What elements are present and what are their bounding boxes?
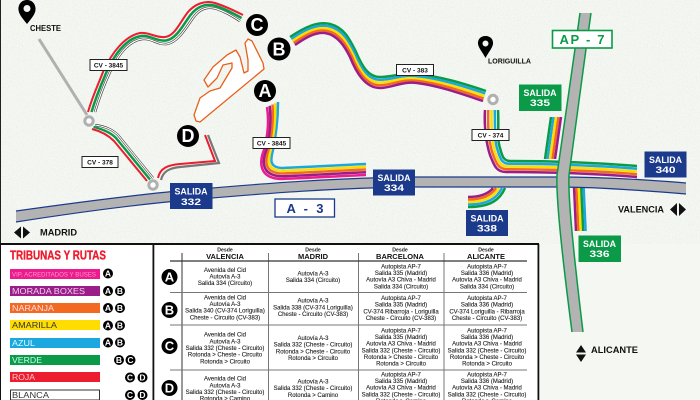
row C routes: Rotonda > Cheste - Circuito xyxy=(450,355,525,361)
legend Blanca: BLANCA xyxy=(12,391,50,400)
row B routes: Autopista AP-7 xyxy=(381,296,422,302)
column header Barcelona xyxy=(376,248,425,261)
row D routes: Rotonda > Camino xyxy=(288,393,339,399)
row C routes: Autovía A3 Chiva - Madrid xyxy=(452,342,522,348)
label CV-378: CV - 378 xyxy=(87,160,113,166)
direction Alicante: ALICANTE xyxy=(591,345,638,355)
exit 338 rainbow stub xyxy=(468,188,505,207)
legend Amarilla xyxy=(10,320,125,330)
legend Blanca: D xyxy=(139,390,146,400)
row A routes: Autovía A-3 xyxy=(209,274,241,280)
row A routes xyxy=(198,264,522,290)
route: rainbow CV-374 xyxy=(485,110,637,177)
pin: Loriguilla: LORIGUILLA xyxy=(488,56,532,66)
legend Roja: C xyxy=(127,372,133,382)
row D routes xyxy=(186,372,526,400)
sign AP-7: AP - 7 xyxy=(560,32,604,47)
row D routes: Autovía A3 Chiva - Madrid xyxy=(452,386,522,392)
exit 332 xyxy=(170,183,212,209)
row A routes: Salida 335 (Madrid) xyxy=(375,271,427,277)
row D routes: Autopista AP-7 xyxy=(381,372,422,378)
row A routes: Avenida del Cid xyxy=(204,268,246,274)
row C routes: Autovía A3 Chiva - Madrid xyxy=(366,342,436,348)
row C routes: Rotonda > Circuito xyxy=(462,362,513,368)
row B routes: Salida 335 (Madrid) xyxy=(375,303,427,309)
legend panel: tribunas y rutas xyxy=(10,248,148,400)
row C routes: Avenida del Cid xyxy=(204,333,246,339)
roundabout Cheste xyxy=(85,117,93,125)
column header Alicante: ALICANTE xyxy=(467,252,505,261)
row A routes: Salida 334 (Circuito) xyxy=(374,284,428,290)
marker C: C xyxy=(250,15,264,35)
bottom panel frame xyxy=(0,243,539,400)
legend Amarilla: A xyxy=(105,320,111,330)
exit 340 xyxy=(644,152,686,178)
label CV-374: CV - 374 xyxy=(478,132,504,140)
row C routes: Salida 332 (Cheste - Circuito) xyxy=(448,348,526,354)
row C routes: Salida 335 (Madrid) xyxy=(375,335,427,341)
legend Morada Boxes: B xyxy=(117,286,123,296)
row B routes: Cheste - Circuito (CV-383) xyxy=(278,312,348,318)
exit 336: 336 xyxy=(590,249,610,259)
label CV-374 xyxy=(472,130,509,140)
route B: rainbow CV-383 xyxy=(290,23,486,101)
legend Blanca: C xyxy=(127,390,133,400)
row A routes: Salida 336 (Madrid) xyxy=(461,271,513,277)
row C routes xyxy=(186,328,526,368)
row C routes: Rotonda > Circuito xyxy=(288,356,339,362)
row A routes: Salida 334 (Circuito) xyxy=(286,278,340,284)
direction Madrid xyxy=(14,226,78,238)
roundabout Loriguilla xyxy=(489,95,497,104)
exit 336: SALIDA xyxy=(583,239,616,249)
label CV-3845 east: CV - 3845 xyxy=(257,140,287,148)
row marker D xyxy=(162,380,178,396)
legend VIP xyxy=(10,268,113,279)
routes table xyxy=(162,248,527,400)
legend Azul: A xyxy=(105,338,111,348)
row C routes: Autovía A-3 xyxy=(209,339,241,345)
legend VIP: A xyxy=(105,268,111,278)
direction Valencia: VALENCIA xyxy=(618,204,664,214)
row A routes: Autopista AP-7 xyxy=(381,264,422,270)
exit 340: SALIDA xyxy=(649,155,682,165)
route A: rainbow CV-3845 xyxy=(261,102,366,179)
legend Amarilla: AMARILLA xyxy=(12,321,58,330)
column header Alicante xyxy=(467,248,505,261)
row D routes: Salida 332 (Cheste - Circuito) xyxy=(448,392,526,398)
row D routes: Salida 332 (Cheste - Circuito) xyxy=(274,386,352,392)
row C routes: Autovía A-3 xyxy=(297,336,329,342)
road to Cheste xyxy=(39,39,87,115)
sign A-3: A - 3 xyxy=(286,201,324,216)
row D routes: Autovía A-3 xyxy=(297,379,329,385)
exit 335: 335 xyxy=(530,98,550,108)
row A routes: Autopista AP-7 xyxy=(467,264,508,270)
exit 336 xyxy=(578,236,621,262)
row C routes: Rotonda > Cheste - Circuito xyxy=(364,355,439,361)
highway AP-7 xyxy=(557,13,591,332)
row B routes: CV-374 Ribarroja - Loriguilla xyxy=(363,309,439,315)
legend Morada Boxes xyxy=(10,286,125,296)
label CV-378 xyxy=(82,156,118,168)
row A routes: Autovía A3 Chiva - Madrid xyxy=(366,278,436,284)
row C routes: Rotonda > Circuito xyxy=(376,362,427,368)
row B routes: Salida 336 (Madrid) xyxy=(461,303,513,309)
row C routes: Salida 332 (Cheste - Circuito) xyxy=(274,343,352,349)
pin: Cheste xyxy=(18,0,62,33)
column header Madrid: Desde xyxy=(305,248,321,254)
row B routes: Salida 340 (CV-374 Loriguilla) xyxy=(185,309,265,315)
marker D: D xyxy=(182,126,194,146)
row C routes: Salida 332 (Cheste - Circuito) xyxy=(362,348,440,354)
exit 338 xyxy=(466,210,508,236)
exit 335 rainbow stub xyxy=(545,117,561,159)
row C routes: Autopista AP-7 xyxy=(467,328,508,334)
exit 335: SALIDA xyxy=(524,88,557,98)
roundabout exit 332 xyxy=(149,181,157,189)
row D routes: Salida 335 (Madrid) xyxy=(375,379,427,385)
exit 332: SALIDA xyxy=(174,186,208,196)
exit 335 xyxy=(519,84,562,111)
row D routes: Autopista AP-7 xyxy=(467,372,508,378)
legend Amarilla: B xyxy=(117,320,123,330)
legend Naranja: B xyxy=(117,303,123,313)
row B routes xyxy=(185,295,525,322)
legend Verde xyxy=(10,355,136,365)
label CV-3845 west xyxy=(90,60,127,70)
sign A-3 xyxy=(275,199,334,217)
row marker C: C xyxy=(165,338,175,354)
column header Valencia: VALENCIA xyxy=(206,252,244,261)
exit 334 xyxy=(373,170,415,196)
marker D xyxy=(177,125,199,147)
label CV-383 xyxy=(396,64,434,76)
label CV-3845 west: CV - 3845 xyxy=(94,62,124,70)
row C routes: Rotonda > Cheste - Circuito xyxy=(276,349,351,355)
row A routes: Salida 334 (Circuito) xyxy=(198,281,252,287)
row marker D: D xyxy=(165,380,174,396)
label CV-383: CV - 383 xyxy=(402,68,428,74)
row C routes: Salida 332 (Cheste - Circuito) xyxy=(186,346,264,352)
legend Verde: B xyxy=(116,355,122,365)
legend Naranja xyxy=(10,303,125,313)
row B routes: Avenida del Cid xyxy=(204,295,246,301)
row D routes: Autovía A-3 xyxy=(209,383,241,389)
row B routes: Cheste - Circuito (CV-383) xyxy=(452,316,522,322)
exit 340: 340 xyxy=(656,165,676,175)
pin: Loriguilla xyxy=(478,36,532,66)
column header Valencia: Desde xyxy=(217,248,233,254)
marker B xyxy=(268,38,290,60)
legend Verde: C xyxy=(127,355,134,365)
row D routes: Salida 332 (Cheste - Circuito) xyxy=(186,390,264,396)
row C routes: Rotonda > Circuito xyxy=(200,359,251,365)
legend Roja xyxy=(10,372,148,382)
sign AP-7 xyxy=(552,30,612,48)
legend Azul: AZUL xyxy=(12,339,36,348)
row D routes: Salida 332 (Cheste - Circuito) xyxy=(362,392,440,398)
column header Barcelona: Desde xyxy=(392,248,408,254)
circuit track xyxy=(194,39,264,122)
column header Madrid xyxy=(298,248,329,261)
row A routes: Autovía A3 Chiva - Madrid xyxy=(452,278,522,284)
legend Roja: ROJA xyxy=(12,373,36,382)
row A routes: Autovía A-3 xyxy=(297,272,329,278)
row B routes: Cheste - Circuito (CV-383) xyxy=(366,316,436,322)
legend Azul: B xyxy=(117,338,123,348)
direction Madrid: MADRID xyxy=(40,228,78,238)
pin: Cheste: CHESTE xyxy=(30,24,62,33)
row marker C xyxy=(162,338,178,354)
legend title: TRIBUNAS Y RUTAS xyxy=(10,248,106,262)
row C routes: Salida 336 (Madrid) xyxy=(461,335,513,341)
exit 338: SALIDA xyxy=(470,214,504,224)
marker B: B xyxy=(272,40,286,60)
route CV-378 red, green, white xyxy=(92,125,153,181)
marker C xyxy=(246,14,268,36)
legend VIP: VIP, ACREDITADOS Y BUSES xyxy=(12,272,97,278)
legend Blanca xyxy=(10,390,148,400)
legend Azul xyxy=(10,338,125,348)
row C routes: Rotonda > Cheste - Circuito xyxy=(188,353,263,359)
exit 336 rainbow stub xyxy=(574,186,586,231)
column header Madrid: MADRID xyxy=(298,252,329,261)
route C: CV-3845 red, green, white xyxy=(88,2,243,112)
row C routes: Autopista AP-7 xyxy=(381,328,422,334)
row B routes: CV-374 Loriguilla - Ribarroja xyxy=(449,309,525,315)
legend Naranja: A xyxy=(105,303,111,313)
direction Valencia xyxy=(618,203,686,216)
exit 334: SALIDA xyxy=(378,173,411,183)
exit 332: 332 xyxy=(181,197,201,207)
exit 334: 334 xyxy=(384,183,404,193)
highway A-3 xyxy=(16,177,686,222)
legend Morada Boxes: MORADA BOXES xyxy=(12,287,85,296)
route D red and grey xyxy=(158,135,219,180)
legend Verde: VERDE xyxy=(12,356,42,365)
row marker B xyxy=(162,302,178,318)
row marker A: A xyxy=(165,270,175,284)
row marker B: B xyxy=(165,302,174,318)
legend Naranja: NARANJA xyxy=(12,304,55,313)
marker A xyxy=(254,80,276,102)
row D routes: Avenida del Cid xyxy=(204,377,246,383)
direction Alicante xyxy=(576,345,638,362)
map routes xyxy=(39,2,637,231)
exit 338: 338 xyxy=(477,224,497,234)
legend Roja: D xyxy=(139,372,146,382)
row B routes: Autopista AP-7 xyxy=(467,296,508,302)
row marker A xyxy=(162,269,178,285)
row B routes: Cheste - Circuito (CV-383) xyxy=(190,315,260,321)
marker A: A xyxy=(258,81,272,101)
label CV-3845 east xyxy=(253,138,290,148)
table rules xyxy=(170,253,527,400)
legend Morada Boxes: A xyxy=(105,286,111,296)
row D routes: Autovía A3 Chiva - Madrid xyxy=(366,386,436,392)
row B routes: Salida 338 (CV-374 Loriguilla) xyxy=(273,305,353,311)
column header Alicante: Desde xyxy=(478,248,494,254)
column header Barcelona: BARCELONA xyxy=(376,252,425,261)
row A routes: Salida 334 (Circuito) xyxy=(460,284,514,290)
row B routes: Autovía A-3 xyxy=(209,302,241,308)
column header Valencia xyxy=(206,248,244,261)
row D routes: Salida 336 (Madrid) xyxy=(461,379,513,385)
row B routes: Autovía A-3 xyxy=(297,299,329,305)
